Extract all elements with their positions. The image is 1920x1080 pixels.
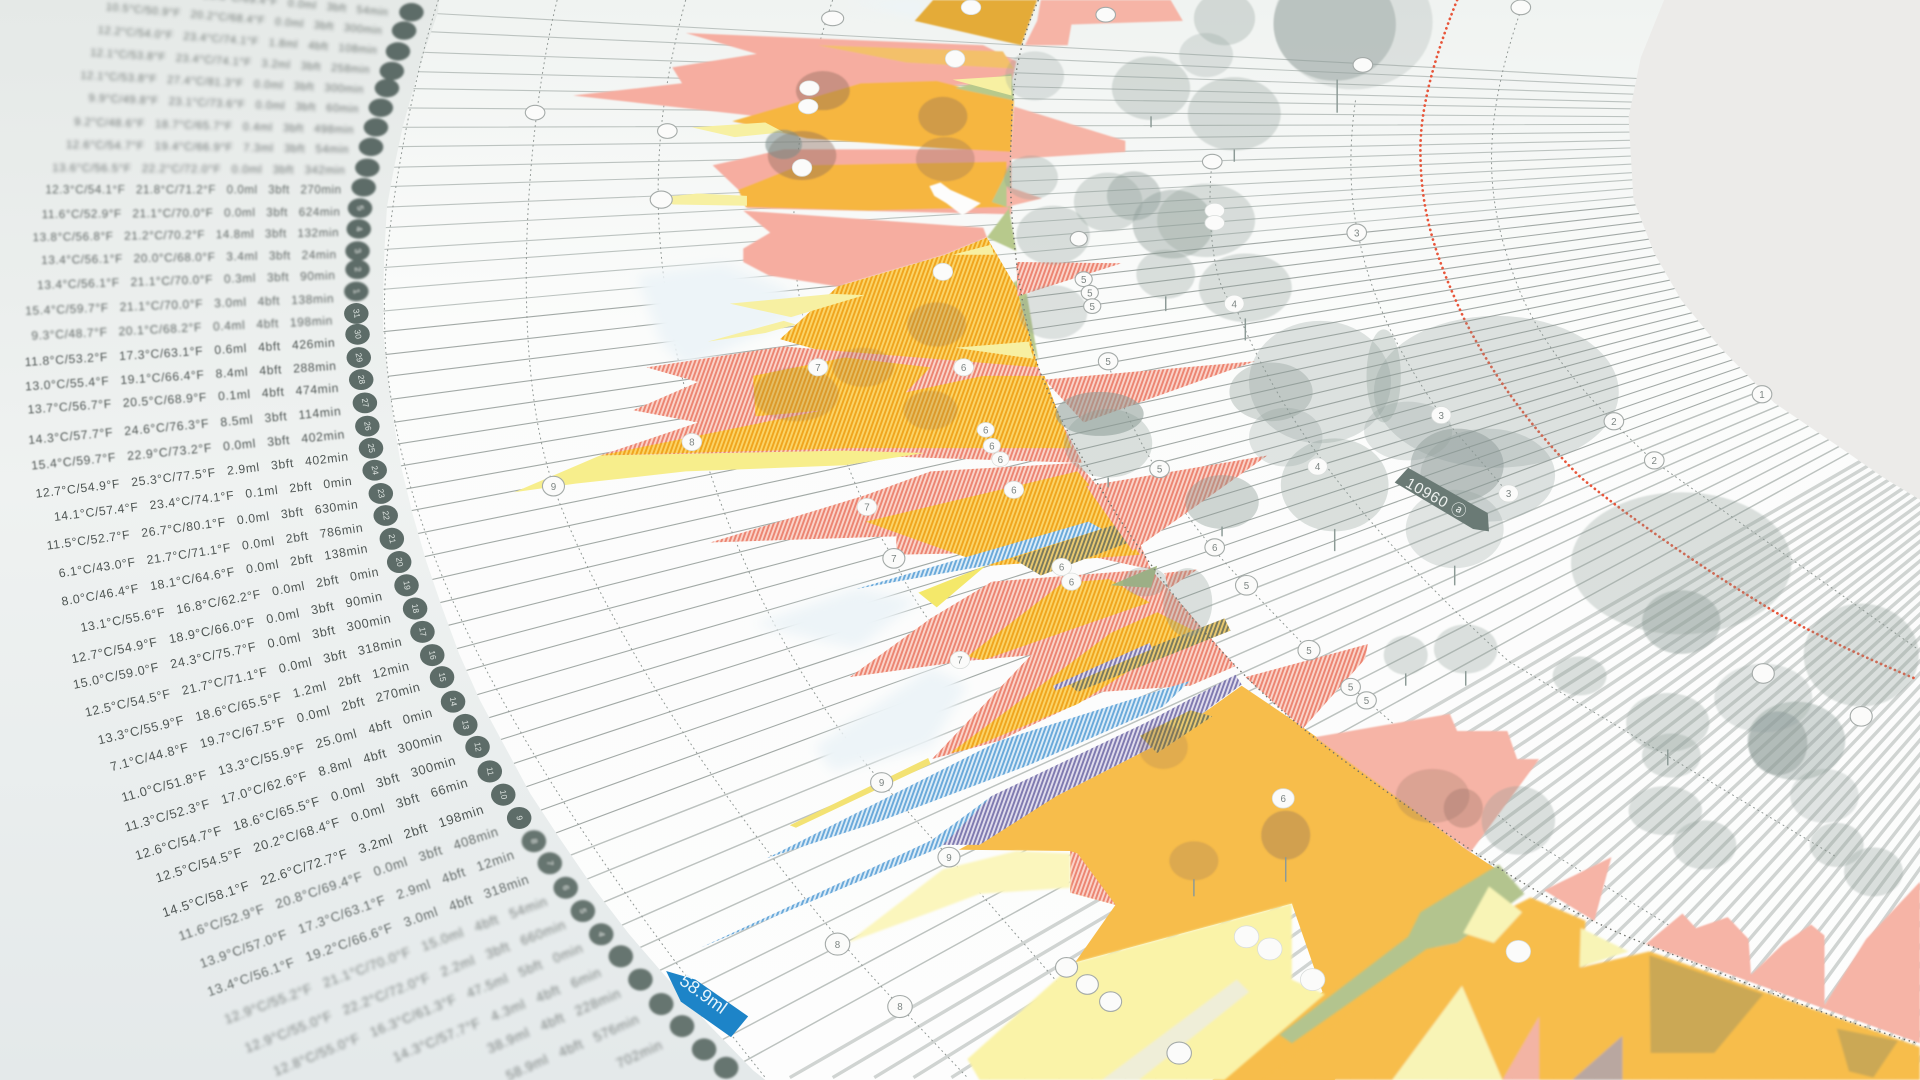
dots bottom: 6 [561, 885, 572, 891]
marker digits: 3 [1354, 228, 1360, 239]
dots in focus: 20 [394, 557, 406, 568]
data rows top (out of focus): 10.5°C/50.9°F 20.2°C/68.4°F 0.0ml 3bft 300min [105, 1, 383, 37]
data rows mid: 13.7°C/56.7°F 20.5°C/68.9°F 0.1ml 4bft 474min [27, 381, 339, 417]
inner circle background [1592, 0, 1920, 514]
dots in focus: 27 [360, 397, 371, 409]
dots top [344, 3, 424, 301]
orange upper hatched wedge [780, 238, 1038, 367]
marker digits: 7 [815, 363, 821, 374]
data rows top (out of focus): 12.1°C/53.8°F 23.4°C/74.1°F 3.2ml 3bft 258min [90, 47, 370, 76]
marker digits: 6 [1212, 543, 1218, 554]
data rows upper [25, 184, 342, 343]
green strip [1280, 864, 1524, 1043]
grey bubbles [753, 0, 1919, 896]
bubbles top [1004, 0, 1433, 339]
dots top: 2 [353, 266, 363, 273]
dots in focus: 18 [410, 603, 421, 614]
data rows top (out of focus): 13.6°C/56.5°F 22.2°C/72.0°F 0.0ml 3bft 342min [52, 162, 345, 177]
data rows in focus: 14.5°C/58.1°F 22.6°C/72.7°F 3.2ml 2bft 198min [160, 802, 486, 920]
marker digits: 1 [1759, 390, 1765, 401]
data rows upper: 15.4°C/59.7°F 21.1°C/70.0°F 3.0ml 4bft 138min [25, 291, 334, 318]
data rows in focus: 14.1°C/57.4°F 23.4°C/74.1°F 0.1ml 2bft 0min [53, 474, 353, 524]
marker digits: 6 [1281, 794, 1287, 805]
large pale yellow wedge [967, 904, 1325, 1080]
marker digits: 9 [879, 778, 884, 789]
marker digits: 6 [989, 441, 995, 452]
big orange wedge [959, 686, 1499, 1080]
dots top: 4 [354, 226, 365, 232]
day number dots [344, 3, 738, 1079]
data rows in focus: 8.0°C/46.4°F 18.1°C/64.6°F 0.0ml 2bft 138min [60, 541, 369, 609]
data rows mid: 11.8°C/53.2°F 17.3°C/63.1°F 0.6ml 4bft 426min [24, 336, 336, 369]
marker digits: 8 [897, 1002, 903, 1013]
pink top wedges [573, 33, 1016, 287]
top wedges out of focus [573, 0, 1038, 361]
data rows in focus: 12.6°C/54.7°F 18.6°C/65.5°F 0.0ml 3bft 300min [133, 753, 458, 863]
bubbles over wedges [753, 71, 1483, 880]
bottom right accents [1502, 955, 1898, 1080]
data rows upper: 13.4°C/56.1°F 21.1°C/70.0°F 0.3ml 3bft 90min [37, 268, 336, 292]
white bottle tag [929, 182, 981, 216]
yellow tip wedge [514, 451, 924, 492]
marker digits: 7 [891, 554, 897, 565]
data rows in focus: 11.3°C/52.3°F 17.0°C/62.6°F 8.8ml 4bft 300min [123, 729, 444, 835]
lower right orange wedge [1264, 898, 1920, 1080]
dots top: 3 [353, 248, 363, 254]
data rows in focus: 7.1°C/44.8°F 19.7°C/67.5°F 0.0ml 2bft 270min [109, 679, 422, 774]
marker digits [551, 228, 1765, 1013]
data rows in focus: 11.0°C/51.8°F 13.3°C/55.9°F 25.0ml 4bft 0min [120, 705, 434, 805]
olive overlap small [1013, 522, 1139, 576]
daily data rows [24, 0, 665, 1080]
markers outlined [525, 0, 1872, 1064]
pale yellow patches [1392, 887, 1629, 1080]
data rows lower: 11.6°C/52.9°F 20.8°C/69.4°F 0.0ml 3bft 408min [176, 824, 501, 944]
data rows in focus: 13.1°C/55.6°F 16.8°C/62.2°F 0.0ml 2bft 0min [79, 565, 380, 635]
red right spikes [1016, 262, 1368, 729]
red lower wedge 2 [850, 569, 1236, 759]
data rows in focus: 15.0°C/59.0°F 24.3°C/75.7°F 0.0ml 3bft 300min [72, 611, 392, 692]
marker digits: 5 [1105, 357, 1111, 368]
dots bottom: 5 [578, 908, 589, 914]
data rows bottom (out of focus): 12.9°C/55.0°F 22.2°C/72.0°F 2.2ml 3bft 660min [243, 917, 568, 1056]
blue wedge 3 [700, 796, 1004, 948]
dots in focus: 21 [387, 533, 398, 544]
dots in focus: 15 [437, 672, 448, 683]
data rows bottom (out of focus): 12.9°C/55.2°F 21.1°C/70.0°F 15.0ml 4bft 54min [222, 894, 550, 1027]
marker digits: 7 [864, 503, 870, 514]
marker digits: 2 [1652, 456, 1657, 467]
dots in focus: 19 [401, 580, 413, 591]
green edge strips [955, 73, 1038, 361]
dots in focus: 9 [514, 815, 525, 821]
dots in focus: 23 [376, 488, 387, 499]
data rows in focus: 12.7°C/54.9°F 18.9°C/66.0°F 0.0ml 3bft 90min [70, 589, 384, 666]
dots in focus: 28 [356, 374, 368, 385]
purple wedge [943, 675, 1242, 845]
red lower wedge 1 [710, 463, 1151, 569]
data rows lower: 13.9°C/57.0°F 17.3°C/63.1°F 2.9ml 4bft 12min [198, 847, 517, 971]
marker digits: 5 [1157, 465, 1163, 476]
data rows in focus: 6.1°C/43.0°F 21.7°C/71.1°F 0.0ml 2bft 786min [58, 521, 364, 580]
yellow slivers [649, 76, 1033, 359]
data rows bottom (out of focus): 14.3°C/57.7°F 4.3ml 4bft 6min [391, 965, 604, 1065]
pale yellow left wedge [847, 851, 1070, 943]
dots in focus: 31 [351, 308, 363, 319]
dots in focus: 30 [352, 329, 364, 340]
data rows bottom (out of focus) [222, 894, 665, 1080]
dots in focus [344, 303, 531, 829]
data rows top (out of focus): 12.2°C/54.0°F 23.4°C/74.1°F 1.8ml 4bft 108min [97, 24, 378, 57]
blue wedge 2 [767, 681, 1190, 858]
callout: 10960 tag: 10960 ⓐ [1403, 475, 1470, 522]
dotted boundary line [1010, 0, 1918, 1043]
red dotted temperature arc [1420, 0, 1918, 680]
dots top: 5 [355, 205, 366, 212]
marker digits: 6 [1069, 577, 1075, 588]
data rows mid: 15.4°C/59.7°F 22.9°C/73.2°F 0.0ml 3bft 402min [31, 427, 346, 473]
dots top: 1 [352, 288, 362, 295]
dots in focus: 24 [370, 465, 381, 476]
callout: 10960 tag [1395, 468, 1489, 531]
data rows bottom (out of focus): 702min [614, 1037, 665, 1071]
marker digits: 9 [551, 482, 556, 493]
marker digits: 4 [1232, 299, 1238, 310]
marker digits: 6 [983, 425, 989, 436]
dots in focus: 26 [362, 421, 374, 432]
dots bottom: 8 [529, 838, 540, 845]
yellow small wedge [918, 566, 986, 607]
data rows mid: 14.3°C/57.7°F 24.6°C/76.3°F 8.5ml 3bft 114min [28, 404, 342, 447]
dots bottom: 7 [545, 860, 556, 867]
marker digits: 3 [1438, 411, 1444, 422]
light blue faint areas [637, 0, 967, 771]
thin yellow streak [790, 758, 931, 828]
data rows top (out of focus) [52, 0, 389, 177]
bubble stems [1108, 80, 1668, 896]
callout: 58.9ml tag: 58.9ml [676, 970, 731, 1018]
dots in focus: 10 [498, 789, 510, 800]
marker digits: 8 [689, 438, 695, 449]
data rows top (out of focus): 9.2°C/48.6°F 18.7°C/65.7°F 0.4ml 3bft 498min [74, 116, 354, 136]
data rows bottom (out of focus): 12.8°C/55.0°F 16.3°C/61.3°F 47.5ml 5bft 0min [271, 940, 585, 1079]
marker digits: 7 [957, 656, 963, 667]
value markers [525, 0, 1872, 1064]
dots bottom [522, 830, 738, 1079]
data rows upper: 12.3°C/54.1°F 21.8°C/71.2°F 0.0ml 3bft 270min [45, 184, 342, 196]
marker digits: 6 [961, 363, 967, 374]
marker digits: 5 [1081, 275, 1087, 286]
marker digits: 5 [1348, 683, 1354, 694]
data rows in focus [35, 449, 486, 920]
small red triangle [1070, 851, 1116, 905]
marker digits: 5 [1087, 288, 1093, 299]
data rows in focus: 12.5°C/54.5°F 20.2°C/68.4°F 0.0ml 3bft 66min [154, 775, 470, 885]
data rows top (out of focus): 12.6°C/54.7°F 19.4°C/66.9°F 7.3ml 3bft 54min [66, 139, 349, 156]
orange middle wedge [600, 376, 1071, 456]
orange stripes in red [967, 579, 1150, 660]
dots in focus: 16 [427, 650, 439, 661]
data rows mid [24, 336, 346, 473]
data rows mid: 13.0°C/55.4°F 19.1°C/66.4°F 8.4ml 4bft 288min [25, 359, 337, 393]
marker digits: 5 [1306, 646, 1312, 657]
red middle wedge [600, 347, 1082, 463]
dots in focus: 14 [448, 696, 459, 707]
bubbles middle [1249, 321, 1391, 443]
data rows bottom (out of focus): 38.9ml 4bft 228min [485, 986, 623, 1056]
data rows in focus: 12.7°C/54.9°F 25.3°C/77.5°F 2.9ml 3bft 402min [35, 449, 349, 501]
data rows upper: 9.3°C/48.7°F 20.1°C/68.2°F 0.4ml 4bft 198min [31, 314, 333, 343]
data rows upper: 11.6°C/52.9°F 21.1°C/70.0°F 0.0ml 3bft 624min [42, 206, 340, 221]
dots in focus: 13 [460, 719, 472, 731]
marker digits: 5 [1090, 302, 1096, 313]
colored wedge chart [514, 0, 1920, 1080]
bubbles lower right [1384, 492, 1919, 896]
callout: 58.9ml tag [666, 970, 748, 1037]
data rows lower: 13.4°C/56.1°F 19.2°C/66.6°F 3.0ml 4bft 318min [205, 872, 531, 999]
marker digits: 6 [1059, 563, 1065, 574]
marker digits: 6 [1011, 485, 1017, 496]
marker digits: 6 [998, 455, 1004, 466]
marker digits: 5 [1364, 696, 1370, 707]
data rows in focus: 13.3°C/55.9°F 18.6°C/65.5°F 1.2ml 2bft 12min [96, 658, 411, 747]
data rows top (out of focus): 9.9°C/49.8°F 23.1°C/73.6°F 0.0ml 3bft 60min [88, 92, 359, 116]
data rows in focus: 12.5°C/54.5°F 21.7°C/71.1°F 0.0ml 3bft 318min [84, 635, 404, 720]
olive band [1065, 618, 1231, 692]
pink right spikes [1007, 0, 1920, 1043]
data rows upper: 13.8°C/56.8°F 21.2°C/70.2°F 14.8ml 3bft 132min [33, 226, 339, 244]
marker digits: 9 [946, 853, 952, 864]
data rows lower [176, 824, 531, 999]
markers filled white [682, 0, 1531, 991]
dots bottom: 4 [596, 931, 607, 938]
dots in focus: 12 [472, 741, 484, 753]
dots in focus: 29 [354, 352, 365, 363]
dots in focus: 22 [381, 510, 392, 521]
marker digits: 8 [835, 940, 841, 951]
dots in focus: 11 [485, 766, 496, 777]
marker digits: 2 [1611, 417, 1617, 428]
dots in focus: 17 [417, 626, 429, 638]
green edge centre [1111, 566, 1157, 588]
dots in focus: 25 [366, 443, 377, 454]
dark olive blob [1140, 710, 1212, 753]
marker digits: 3 [1506, 489, 1512, 500]
lower wedges out of focus [847, 851, 1920, 1080]
data rows in focus: 11.5°C/52.7°F 26.7°C/80.1°F 0.0ml 3bft 630min [46, 497, 359, 553]
marker digits: 5 [1244, 581, 1250, 592]
data rows top (out of focus): 12.1°C/53.8°F 27.4°C/81.3°F 0.0ml 3bft 300min [80, 70, 364, 96]
marker digits: 4 [1315, 462, 1321, 473]
orange top wedges [732, 0, 1037, 211]
purple dash [1053, 643, 1152, 691]
concentric dotted scale arcs [384, 0, 1918, 1078]
blue wedge 1 [856, 522, 1102, 589]
data rows upper: 13.4°C/56.1°F 20.0°C/68.0°F 3.4ml 3bft 24min [41, 248, 337, 267]
